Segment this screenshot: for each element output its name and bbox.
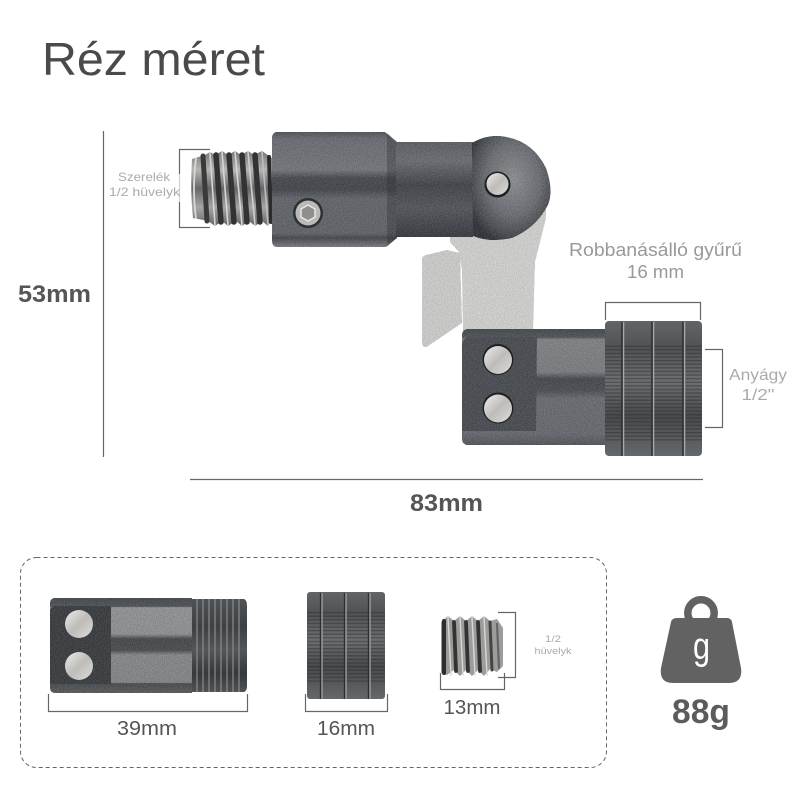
part: knurled ring xyxy=(307,592,385,699)
thread size label: Szerelék xyxy=(118,170,171,184)
ball pin xyxy=(484,172,510,198)
ring width bracket xyxy=(606,302,700,320)
part: threaded base xyxy=(50,598,247,693)
knurled ring xyxy=(605,321,702,456)
part: threaded stud xyxy=(441,616,503,676)
block pin upper xyxy=(482,344,514,375)
bracket: 13mm xyxy=(440,673,504,690)
icon: weight xyxy=(661,600,741,683)
weight value: 88g xyxy=(672,693,730,731)
cylinder neck xyxy=(396,142,473,237)
label: 13mm: 13mm xyxy=(444,697,500,719)
label: 39mm: 39mm xyxy=(117,718,177,740)
bracket: 39mm xyxy=(48,694,248,712)
height dimension line xyxy=(102,131,104,457)
width label: 83mm xyxy=(410,490,483,517)
hex socket screw xyxy=(293,198,323,228)
hex body xyxy=(272,132,397,247)
height label: 53mm xyxy=(18,281,91,308)
icon: weight: g xyxy=(693,626,710,668)
product: articulated mount xyxy=(191,132,702,456)
title: Réz méret xyxy=(42,33,265,85)
label: stud diameter: hüvelyk xyxy=(534,646,572,656)
label: stud diameter: 1/2 xyxy=(545,634,561,644)
panel: parts breakdown xyxy=(20,558,606,768)
nut size label: 1/2" xyxy=(742,387,774,404)
threaded stud xyxy=(191,151,272,226)
label: stud diameter xyxy=(534,634,572,656)
ball joint xyxy=(472,136,551,240)
nut size bracket xyxy=(705,350,722,428)
dashed panel border xyxy=(20,558,606,768)
nut size label xyxy=(729,367,787,404)
width dimension line xyxy=(190,478,703,480)
bracket: stud diameter xyxy=(498,612,516,678)
label: 16mm: 16mm xyxy=(317,718,375,740)
block pin lower xyxy=(482,392,514,424)
bracket: 16mm xyxy=(306,694,388,712)
lower block xyxy=(462,329,606,445)
thread size bracket xyxy=(180,150,210,228)
ring width label xyxy=(569,240,742,282)
ring width label: Robbanásálló gyűrű xyxy=(569,240,742,260)
silver bracket xyxy=(422,205,546,347)
ring width label: 16 mm xyxy=(627,262,684,282)
thread size label xyxy=(106,170,182,202)
nut size label: Anyágy xyxy=(729,367,787,384)
thread size label: 1/2 hüvelyk xyxy=(109,185,181,199)
